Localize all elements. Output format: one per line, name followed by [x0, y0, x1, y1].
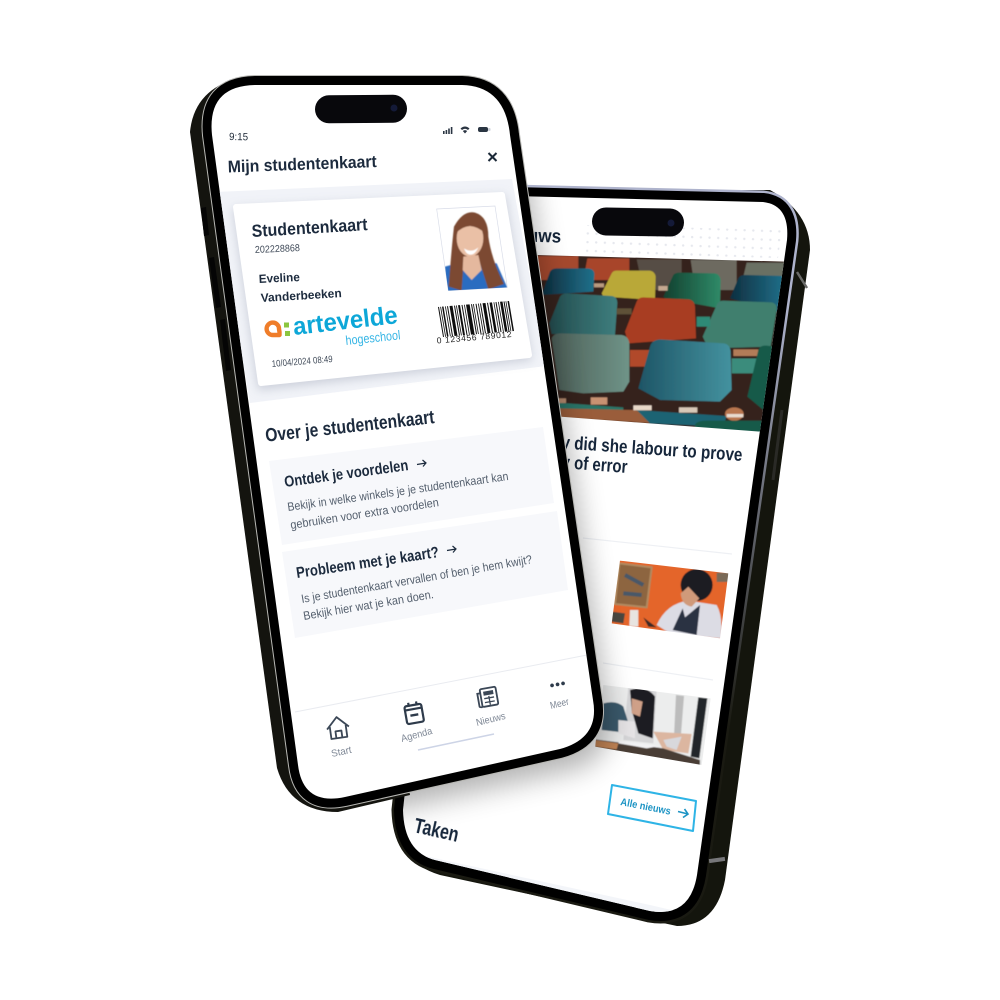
screen title: Mijn studentenkaart	[227, 152, 377, 176]
front phone notch	[315, 95, 407, 123]
heading: Taken: Taken	[412, 814, 461, 847]
front phone side frame	[190, 78, 410, 812]
card description line 2: gebruiken voor extra voordelen	[289, 495, 440, 532]
link card: voordelen	[269, 427, 554, 545]
card background	[269, 427, 554, 545]
front phone screen	[212, 85, 594, 799]
close icon	[488, 153, 496, 161]
back phone rim	[403, 195, 787, 912]
shadow of front phone	[403, 196, 624, 824]
status bar time: 9:15	[229, 131, 248, 143]
icon: home	[326, 716, 350, 739]
card title: Ontdek je voordelen	[283, 457, 409, 491]
card body	[236, 195, 529, 383]
card background	[282, 511, 568, 638]
back phone screen contents	[208, 87, 790, 925]
button arrow	[678, 809, 688, 818]
student portrait	[437, 206, 508, 292]
card background band	[215, 179, 546, 403]
card description line 2: Bekijk hier wat je kan doen.	[302, 587, 435, 623]
front phone	[190, 78, 594, 812]
headline line 1: Why did she labour to prove	[537, 430, 743, 465]
front phone bezel	[212, 85, 594, 799]
artevelde logo	[264, 306, 400, 346]
back phone screen	[403, 195, 787, 912]
headline line 2: y of error	[561, 451, 628, 477]
arrow	[417, 460, 426, 466]
logo subtitle: hogeschool	[345, 327, 401, 348]
bottom navigation	[326, 682, 571, 760]
card description line 1: Is je studentenkaart vervallen of ben je hem kwijt?	[300, 552, 533, 606]
card title: Probleem met je kaart?	[295, 544, 440, 582]
back phone camera	[668, 220, 674, 226]
news thumbnail: man painting	[612, 560, 728, 638]
front phone camera	[390, 104, 398, 112]
arrow	[447, 546, 456, 552]
photo: lecture hall chairs	[530, 252, 790, 435]
nav label: Meer: Meer	[549, 697, 571, 712]
section heading: Over je studentenkaart: Over je studentenkaart	[264, 407, 436, 447]
front phone screen contents	[215, 126, 587, 760]
card shadow	[233, 195, 532, 390]
news thumbnail: student studying	[595, 685, 710, 765]
phone mockups scene	[190, 75, 810, 926]
student last name: Vanderbeeken	[260, 286, 342, 305]
article headline	[566, 436, 742, 473]
nav label: Start: Start	[330, 745, 353, 760]
link card: probleem	[282, 511, 568, 638]
back phone	[392, 184, 810, 926]
heading: Nieuws: Nieuws	[501, 225, 561, 248]
button label: Alle nieuws	[619, 796, 672, 818]
card description line 1: Bekijk in welke winkels je je studentenkaart kan	[286, 469, 509, 514]
button: Alle nieuws	[608, 785, 696, 831]
icon: calendar	[404, 701, 424, 724]
back phone bezel	[403, 195, 787, 912]
back phone notch	[592, 207, 684, 237]
status icons	[443, 126, 490, 134]
front phone rim	[212, 85, 594, 799]
card title: Studentenkaart	[251, 214, 368, 241]
barcode number: 0 123456 789012	[436, 329, 512, 345]
back phone side frame	[393, 190, 810, 926]
student number: 202228868	[255, 243, 300, 256]
icon: newspaper	[477, 687, 498, 708]
barcode	[438, 301, 514, 337]
nav active indicator	[418, 734, 494, 750]
issue timestamp: 10/04/2024 08:49	[271, 354, 333, 370]
student first name: Eveline	[258, 270, 300, 286]
logo mark	[267, 323, 280, 335]
student card	[236, 195, 529, 383]
icon: more dots	[550, 682, 565, 687]
logo green squares	[284, 322, 290, 336]
dot pattern header	[582, 225, 782, 258]
nav label: Nieuws: Nieuws	[475, 711, 507, 729]
front phone volume buttons	[201, 207, 231, 371]
nav label: Agenda: Agenda	[400, 726, 434, 745]
logo wordmark: artevelde	[292, 301, 399, 341]
